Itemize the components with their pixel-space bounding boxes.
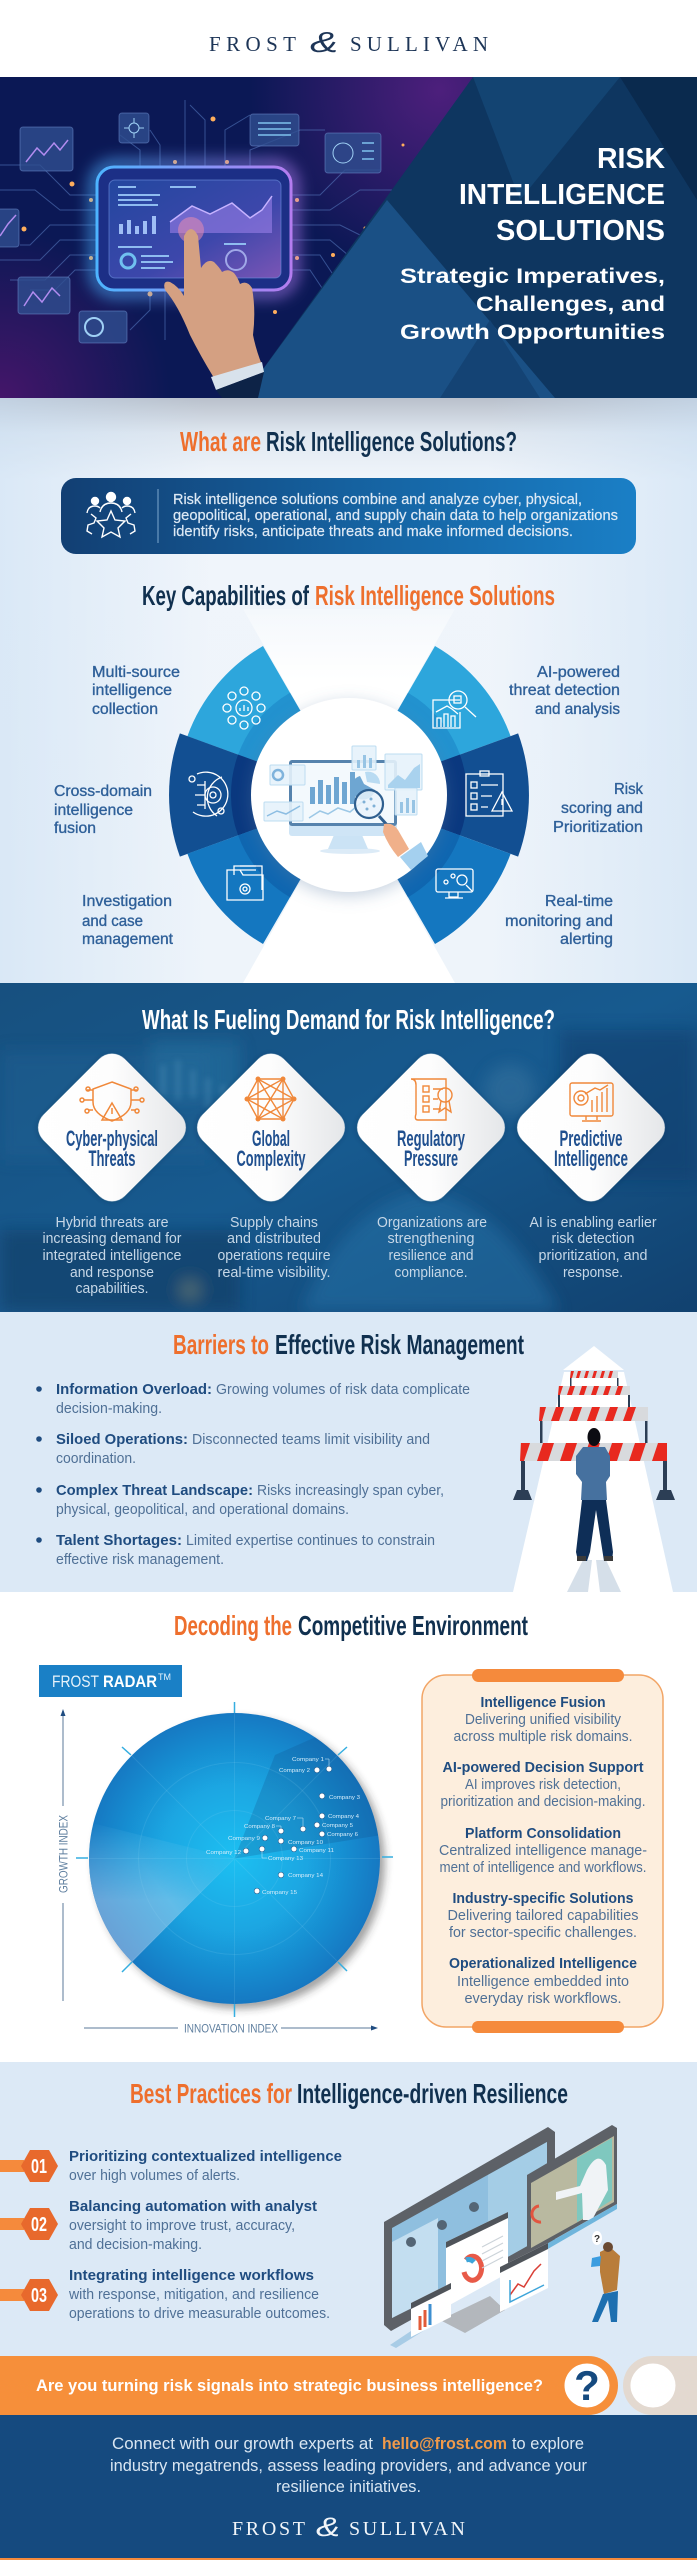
hero title: RISK xyxy=(597,143,665,175)
axis: growth index xyxy=(56,1709,70,2001)
radar companies xyxy=(206,1757,360,1896)
practice 02: 02 xyxy=(31,2214,47,2236)
card: regulatory pressure xyxy=(350,1046,512,1209)
radar companies: Company 8 xyxy=(244,1824,275,1830)
theme: platform consolidation: ment of intelligence and workflows. xyxy=(440,1860,646,1876)
radar disc xyxy=(76,1700,400,2017)
practice 03 xyxy=(0,2267,330,2322)
text: predictive intelligence xyxy=(530,1215,657,1281)
text: predictive intelligence: response. xyxy=(563,1265,623,1281)
top logo: SULLIVAN xyxy=(350,32,488,56)
capabilities wheel xyxy=(169,609,529,983)
label: investigation: and case xyxy=(82,913,143,930)
profiles on monitor xyxy=(406,2202,479,2247)
frost radar label: RADAR xyxy=(103,1672,157,1691)
footer logo: SULLIVAN xyxy=(349,2518,465,2540)
radar companies: Company 12 xyxy=(206,1850,241,1856)
text: regulatory pressure xyxy=(377,1215,487,1281)
radar companies: Company 1 xyxy=(292,1757,324,1763)
label: investigation xyxy=(82,893,174,948)
centre circle with monitor xyxy=(251,698,447,892)
theme: operationalized intelligence: Operationalized Intelligence xyxy=(449,1956,637,1972)
axis: innovation index xyxy=(84,2022,378,2036)
radar companies: Company 10 xyxy=(288,1840,323,1846)
practice 01: over high volumes of alerts. xyxy=(69,2167,240,2184)
hero banner xyxy=(0,77,697,398)
footer logo: FROST xyxy=(232,2518,305,2540)
label: investigation: Investigation xyxy=(82,893,172,910)
axis: innovation index: INNOVATION INDEX xyxy=(184,2022,278,2036)
barrier list xyxy=(36,1381,470,1568)
icon: question mark xyxy=(564,2362,610,2409)
card: predictive intelligence xyxy=(510,1046,672,1209)
label: cross-domain: fusion xyxy=(54,820,96,837)
text: regulatory pressure: strengthening xyxy=(388,1231,474,1247)
segment: multi-source xyxy=(187,646,349,795)
white report document xyxy=(446,2212,508,2307)
theme: decision support: AI-powered Decision Support xyxy=(442,1760,644,1776)
text: cyber-physical threats: and response xyxy=(70,1265,154,1281)
theme: intelligence fusion xyxy=(454,1695,632,1745)
text: global complexity: operations require xyxy=(218,1248,330,1264)
label: risk scoring: Risk xyxy=(614,781,643,798)
radar chart xyxy=(56,1700,400,2036)
barrier list: physical, geopolitical, and operational domains. xyxy=(56,1501,349,1518)
person from behind xyxy=(576,1428,613,1561)
theme: operationalized intelligence: everyday risk workflows. xyxy=(464,1991,622,2007)
barrier list: Talent Shortages: xyxy=(56,1532,182,1549)
label: real-time xyxy=(505,893,613,948)
label: cross-domain: intelligence xyxy=(54,802,133,819)
radar companies: Company 14 xyxy=(288,1873,323,1879)
card: cyber-physical threats: Cyber-physical xyxy=(66,1126,158,1151)
label: real-time: Real-time xyxy=(545,893,613,910)
text: predictive intelligence: prioritization, and xyxy=(538,1248,648,1264)
heading: competitive environment: Decoding the xyxy=(174,1610,292,1641)
label: ai-powered: threat detection xyxy=(509,682,620,699)
heading: competitive environment xyxy=(174,1610,528,1641)
radar companies: Company 13 xyxy=(268,1856,303,1862)
barrier list: Limited expertise continues to constrain xyxy=(186,1532,435,1549)
theme: platform consolidation xyxy=(439,1826,647,1876)
barrier list: Information Overload: xyxy=(56,1381,212,1398)
theme: operationalized intelligence xyxy=(449,1956,637,2007)
barricade bars xyxy=(520,1371,667,1461)
label: multi-source: Multi-source xyxy=(92,664,180,681)
label: multi-source: collection xyxy=(92,701,158,718)
label: investigation: management xyxy=(82,931,174,948)
illustration: isometric dashboards xyxy=(384,2125,620,2348)
segment: ai-powered xyxy=(349,646,511,795)
top logo: & xyxy=(310,27,338,59)
segment: risk scoring xyxy=(349,733,529,857)
definition box xyxy=(61,478,636,554)
heading: barriers xyxy=(173,1329,524,1360)
card: global complexity xyxy=(190,1046,352,1209)
text: global complexity: Supply chains xyxy=(230,1215,318,1231)
practice 01: Prioritizing contextualized intelligence xyxy=(69,2148,342,2165)
card: predictive intelligence: Intelligence xyxy=(554,1146,628,1171)
card: regulatory pressure: Pressure xyxy=(404,1146,458,1171)
call to action bar: Are you turning risk signals into strategic business intelligence? xyxy=(36,2376,543,2395)
barrier list: decision-making. xyxy=(56,1400,162,1417)
hero title: INTELLIGENCE xyxy=(459,179,665,211)
text: cyber-physical threats xyxy=(42,1215,182,1297)
navy diagonal panel xyxy=(242,77,697,398)
label: risk scoring xyxy=(553,781,643,836)
heading: competitive environment: Competitive Environment xyxy=(298,1610,528,1641)
footer contact text: industry megatrends, assess leading providers, and advance your xyxy=(110,2456,587,2475)
label: real-time: alerting xyxy=(560,931,613,948)
barrier list: Complex Threat Landscape: xyxy=(56,1482,253,1499)
label: risk scoring: Prioritization xyxy=(553,819,643,836)
practice 02: Balancing automation with analyst xyxy=(69,2198,317,2215)
practice 01 xyxy=(0,2148,342,2184)
theme: intelligence fusion: across multiple risk domains. xyxy=(454,1729,632,1745)
axis: growth index: GROWTH INDEX xyxy=(56,1815,70,1893)
bar chart document xyxy=(411,2283,451,2337)
practice 03: 03 xyxy=(31,2285,47,2307)
glowing dashboard screen xyxy=(95,165,293,292)
illustration: roadblock and person xyxy=(513,1346,675,1592)
text: cyber-physical threats: integrated intelligence xyxy=(42,1248,182,1264)
hero title: Challenges, and xyxy=(476,292,665,316)
barrier list: effective risk management. xyxy=(56,1551,224,1568)
label: risk scoring: scoring and xyxy=(561,800,643,817)
radar companies: Company 4 xyxy=(328,1814,359,1820)
circuit traces xyxy=(0,100,400,340)
heading: best practices: Best Practices for xyxy=(130,2078,292,2109)
segment: real-time xyxy=(349,795,511,944)
heading: key capabilities: Risk Intelligence Solutions xyxy=(315,580,555,611)
text: cyber-physical threats: increasing demand for xyxy=(42,1231,182,1247)
frost radar label xyxy=(39,1665,182,1697)
radar companies: Company 15 xyxy=(262,1890,297,1896)
card: cyber-physical threats: Threats xyxy=(88,1146,136,1171)
text: predictive intelligence: AI is enabling earlier xyxy=(530,1215,657,1231)
heading: what are risk intelligence solutions: What are xyxy=(180,426,261,457)
barrier list: Disconnected teams limit visibility and xyxy=(192,1431,430,1448)
theme: industry-specific: Delivering tailored capabilities xyxy=(448,1908,638,1924)
practice 01: 01 xyxy=(31,2156,47,2178)
heading: best practices: Intelligence-driven Resilience xyxy=(297,2078,568,2109)
hand pointing xyxy=(164,229,264,398)
theme: industry-specific: Industry-specific Solutions xyxy=(452,1891,634,1907)
call to action bar xyxy=(0,2356,697,2415)
practice 03: operations to drive measurable outcomes. xyxy=(69,2305,330,2322)
radar companies: Company 6 xyxy=(327,1832,358,1838)
practice 03: with response, mitigation, and resilience xyxy=(68,2286,319,2303)
practice 02: and decision-making. xyxy=(69,2236,202,2253)
definition text xyxy=(173,492,618,540)
barrier list: Risks increasingly span cyber, xyxy=(257,1482,444,1499)
practice 02: oversight to improve trust, accuracy, xyxy=(69,2217,295,2234)
heading: best practices xyxy=(130,2078,568,2109)
barrier list: Growing volumes of risk data complicate xyxy=(216,1381,470,1398)
theme: decision support: prioritization and decision-making. xyxy=(440,1794,646,1810)
label: real-time: monitoring and xyxy=(505,913,613,930)
footer logo: & xyxy=(316,2512,340,2542)
text: global complexity: real-time visibility. xyxy=(218,1265,330,1281)
frost radar label: FROST xyxy=(52,1672,99,1691)
definition text: identify risks, anticipate threats and make informed decisions. xyxy=(173,524,573,540)
label: ai-powered xyxy=(509,664,620,718)
heading: what are risk intelligence solutions: Risk Intelligence Solutions? xyxy=(266,426,517,457)
standing person: ? xyxy=(594,2234,600,2245)
text: cyber-physical threats: capabilities. xyxy=(76,1281,148,1297)
hero title: Strategic Imperatives, xyxy=(400,264,665,288)
text: cyber-physical threats: Hybrid threats are xyxy=(56,1215,168,1231)
theme: decision support xyxy=(440,1760,646,1810)
heading: barriers: Effective Risk Management xyxy=(275,1329,524,1360)
label: multi-source: intelligence xyxy=(92,682,172,699)
icon: team with star xyxy=(87,492,135,537)
hero title: Growth Opportunities xyxy=(400,320,665,344)
text: global complexity: and distributed xyxy=(227,1231,321,1247)
top logo xyxy=(209,27,488,59)
card: regulatory pressure: Regulatory xyxy=(397,1126,465,1151)
standing person xyxy=(591,2231,620,2322)
section background: what are / capabilities xyxy=(0,398,697,983)
radar companies: Company 2 xyxy=(279,1768,310,1774)
capability labels xyxy=(54,664,643,948)
floating data cards xyxy=(0,113,381,343)
hero title: SOLUTIONS xyxy=(496,215,665,247)
footer panel xyxy=(0,2415,697,2560)
icon: question mark: ? xyxy=(574,2362,600,2409)
label: multi-source xyxy=(92,664,180,718)
panel: demand drivers xyxy=(0,983,697,1312)
footer logo xyxy=(232,2512,465,2542)
radar companies: Company 5 xyxy=(322,1823,353,1829)
card: predictive intelligence: Predictive xyxy=(560,1126,622,1151)
heading: key capabilities: Key Capabilities of xyxy=(142,580,309,611)
theme: operationalized intelligence: Intelligence embedded into xyxy=(457,1974,629,1990)
panel: barriers xyxy=(0,1312,697,1592)
footer contact text xyxy=(110,2434,587,2496)
label: cross-domain xyxy=(54,783,152,837)
text: global complexity xyxy=(218,1215,330,1281)
theme: platform consolidation: Centralized intelligence manage- xyxy=(439,1843,647,1859)
card: cyber-physical threats xyxy=(31,1046,193,1209)
hero title xyxy=(400,143,665,344)
segment: cross-domain xyxy=(169,733,349,857)
text: regulatory pressure: Organizations are xyxy=(377,1215,487,1231)
footer contact text: Connect with our growth experts at xyxy=(112,2434,373,2453)
footer contact text: hello@frost.com xyxy=(382,2434,507,2453)
radar companies: Company 3 xyxy=(329,1795,360,1801)
theme: decision support: AI improves risk detection, xyxy=(465,1777,621,1793)
robot panel xyxy=(527,2125,617,2252)
label: cross-domain: Cross-domain xyxy=(54,783,152,800)
radar companies: Company 11 xyxy=(299,1848,334,1854)
definition text: Risk intelligence solutions combine and analyze cyber, physical, xyxy=(173,492,582,508)
practice 02 xyxy=(0,2198,317,2253)
text: predictive intelligence: risk detection xyxy=(552,1231,634,1247)
card: global complexity: Global xyxy=(252,1126,290,1151)
heading: key capabilities xyxy=(142,580,555,611)
radar companies: Company 7 xyxy=(265,1816,296,1822)
line chart document xyxy=(500,2243,548,2312)
glowing nodes xyxy=(22,116,404,314)
radar companies: Company 9 xyxy=(228,1836,260,1842)
label: ai-powered: AI-powered xyxy=(537,664,620,681)
label: ai-powered: and analysis xyxy=(535,701,620,718)
card: global complexity: Complexity xyxy=(236,1146,306,1171)
theme: intelligence fusion: Intelligence Fusion xyxy=(480,1695,606,1711)
theme: platform consolidation: Platform Consolidation xyxy=(465,1826,621,1842)
barrier list: Siloed Operations: xyxy=(56,1431,188,1448)
practice 03: Integrating intelligence workflows xyxy=(69,2267,314,2284)
theme: intelligence fusion: Delivering unified visibility xyxy=(465,1712,622,1728)
panel: competitive themes xyxy=(422,1669,663,2033)
footer contact text: resilience initiatives. xyxy=(276,2477,421,2496)
theme: industry-specific: for sector-specific challenges. xyxy=(449,1925,637,1941)
heading: barriers: Barriers to xyxy=(173,1329,269,1360)
segment: investigation xyxy=(187,795,349,944)
barrier list: coordination. xyxy=(56,1450,136,1467)
theme: industry-specific xyxy=(448,1891,638,1941)
definition text: geopolitical, operational, and supply chain data to help organizations xyxy=(173,508,618,524)
text: regulatory pressure: compliance. xyxy=(394,1265,468,1281)
top logo: FROST xyxy=(209,32,296,56)
heading: what are risk intelligence solutions xyxy=(180,426,517,457)
panel: best practices xyxy=(0,2062,697,2415)
frost radar label: TM xyxy=(158,1672,171,1682)
text: regulatory pressure: resilience and xyxy=(388,1248,474,1264)
footer contact text: to explore xyxy=(512,2434,584,2453)
